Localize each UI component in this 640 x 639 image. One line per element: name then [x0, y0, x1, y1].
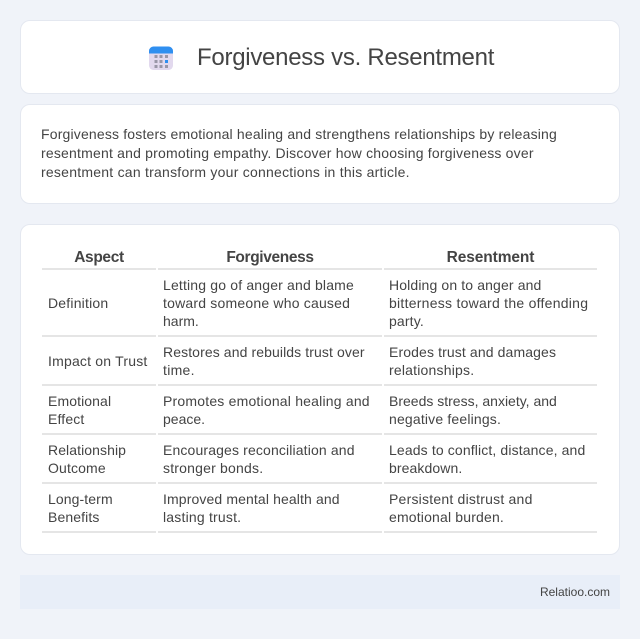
row: relationship outcome: breakdown. [389, 460, 462, 476]
icon: calendar [149, 46, 173, 70]
row: relationship outcome: Encourages reconciliation and [163, 442, 355, 458]
title: Forgiveness vs. Resentment [197, 44, 494, 71]
header card [20, 20, 620, 94]
row: definition: party. [389, 313, 424, 329]
row: definition: Holding on to anger and [389, 277, 541, 293]
row: long-term benefits: Improved mental health and [163, 491, 340, 507]
row: impact on trust: Restores and rebuilds trust over [163, 344, 365, 360]
table header: Resentment [447, 249, 534, 266]
row: long-term benefits [48, 491, 533, 525]
row: long-term benefits: Long-term [48, 491, 113, 507]
row: definition: Definition [48, 295, 108, 311]
row: definition: bitterness toward the offending [389, 295, 588, 311]
row: long-term benefits: Benefits [48, 509, 100, 525]
row: impact on trust: Impact on Trust [48, 353, 147, 369]
row: emotional effect: Breeds stress, anxiety, and [389, 393, 557, 409]
row: relationship outcome: Outcome [48, 460, 106, 476]
footer text: Relatioo.com [540, 585, 610, 599]
row: long-term benefits: lasting trust. [163, 509, 241, 525]
row: impact on trust: time. [163, 362, 195, 378]
intro panel: resentment and promoting empathy. Discover how choosing forgiveness over [41, 145, 534, 161]
row: emotional effect: Promotes emotional healing and [163, 393, 370, 409]
row: definition: toward someone who caused [163, 295, 350, 311]
row: long-term benefits: emotional burden. [389, 509, 504, 525]
intro panel [20, 104, 620, 204]
row: emotional effect: Effect [48, 411, 84, 427]
row: relationship outcome [48, 442, 585, 476]
table [42, 249, 597, 533]
row: impact on trust [48, 344, 556, 378]
row: definition: Letting go of anger and blame [163, 277, 354, 293]
row: emotional effect: peace. [163, 411, 205, 427]
table header [74, 249, 534, 266]
row: emotional effect: negative feelings. [389, 411, 501, 427]
footer bar [20, 575, 620, 609]
row: definition: harm. [163, 313, 199, 329]
row: long-term benefits: Persistent distrust and [389, 491, 533, 507]
row: emotional effect: Emotional [48, 393, 111, 409]
row: impact on trust: Erodes trust and damages [389, 344, 556, 360]
intro panel: resentment can transform your connections in this article. [41, 164, 410, 180]
row: relationship outcome: stronger bonds. [163, 460, 263, 476]
row: emotional effect [48, 393, 557, 427]
table header: Forgiveness [226, 249, 314, 266]
row: impact on trust: relationships. [389, 362, 474, 378]
table header: Aspect [74, 249, 124, 266]
row: relationship outcome: Relationship [48, 442, 126, 458]
row: definition [48, 277, 588, 329]
row: relationship outcome: Leads to conflict, distance, and [389, 442, 585, 458]
intro panel: Forgiveness fosters emotional healing and strengthens relationships by releasing [41, 126, 557, 142]
table panel [20, 224, 620, 555]
